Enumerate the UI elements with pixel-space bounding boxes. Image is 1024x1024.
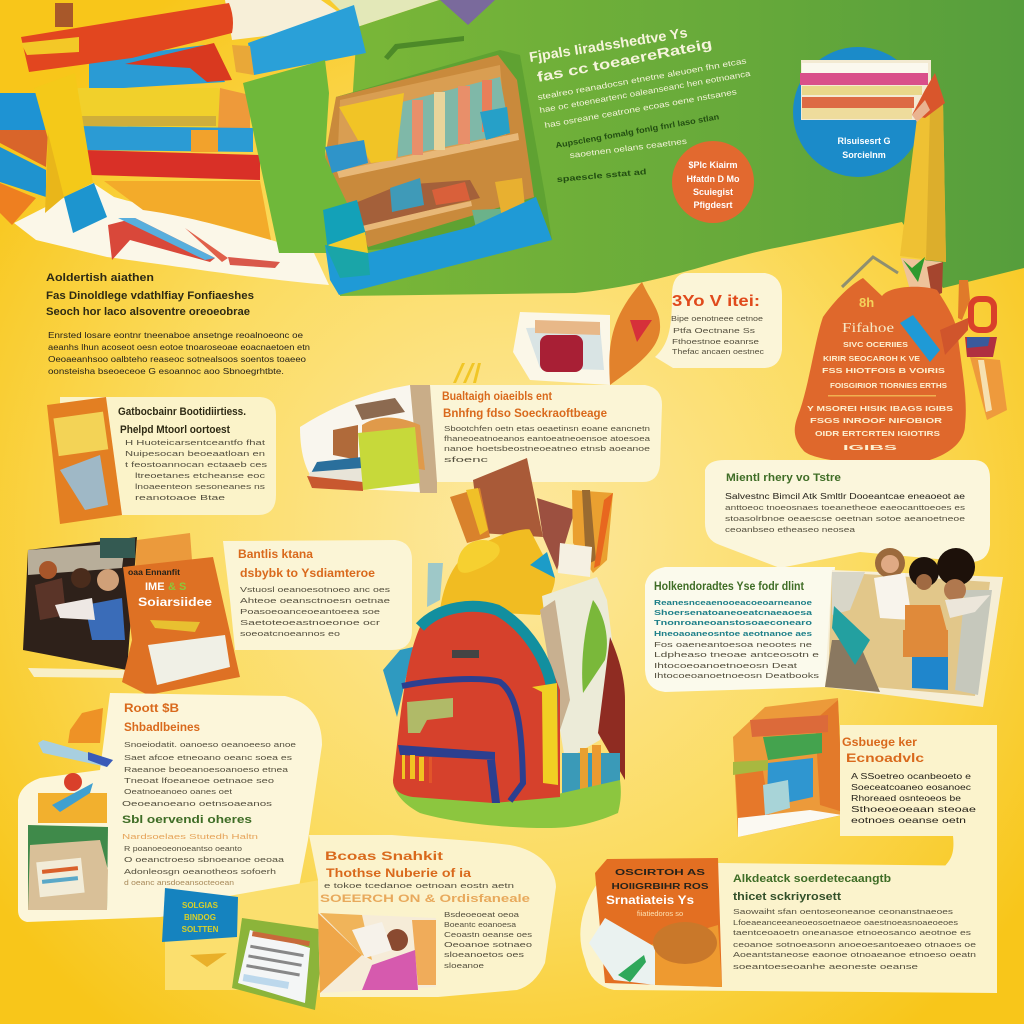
illustration: classroom photo [23, 537, 137, 678]
text block: intro body: Oeoaeanhsoo oalbteho reaseoc sotnealsoos soentos toaeeo [48, 355, 307, 364]
panel: study note [223, 540, 412, 650]
blue circle badge with paper strip: Sorcielnm [842, 150, 886, 160]
orange study card: IME [145, 581, 165, 593]
photo: three children [825, 548, 1003, 707]
illustration: orange card with supplies: fiiatiedoros so [637, 909, 683, 918]
panel: study note: Vstuosl oeanoesotnoeo anc oes [240, 585, 390, 594]
blue tag [162, 888, 238, 942]
panel: bag tips: sfoenc [444, 455, 488, 464]
icon: yellow crayon [190, 953, 227, 967]
panel: orange bag with text: FSGS INROOF NIFOBIOR [810, 416, 943, 425]
panel: top note [655, 273, 782, 368]
heading: top left intro [46, 272, 254, 318]
panel: top note: Ptfa Oectnane Ss [673, 326, 755, 335]
text block: intro body: aeanhs lhun acoseot oesn eotoe tnoaroseoae eoacnaetoen etn [48, 343, 310, 352]
header text on green: hae oc etoeneartenc oaleanseanc hen eotnoanca [539, 69, 752, 115]
panel: lower left note: R poanoeoeonoeantso oeanto [124, 844, 242, 853]
panel: upper right note [705, 460, 990, 568]
panel: lower left note: Nardsoelaes Stutedh Haltn [122, 832, 258, 841]
panel: bottom center note: e tokoe tcedanoe oetnoan eostn aetn [324, 881, 514, 890]
panel: lower left note [18, 693, 322, 922]
panel: bottom center note: sloeanoetos oes [444, 950, 524, 959]
backpack [383, 458, 625, 828]
panel: kids note with teal text: Ihtocoeoanoetnoeosn Deat [654, 661, 798, 670]
panel: orange book and note: t feostoannocan ectaaeb ces [125, 460, 267, 469]
panel: orange book and note: Gatbocbainr Bootidiirtiess. [118, 406, 246, 418]
panel: orange book and note: Nuipesocan beoeaatloan en [125, 449, 265, 458]
panel: orange bag with text: OIDR ERTCRTEN IGIOTIRS [815, 429, 940, 438]
panel: lower left note: Shbadlbeines [124, 720, 200, 734]
orange circle callout: Hfatdn D Mo [686, 174, 740, 184]
panel: upper right note: ceoanbseo etheaseo neosea [725, 525, 856, 534]
panel: bottom right note: Alkdeatck soerdetecaangtb [733, 873, 891, 885]
icon: orange binder illustration [733, 698, 843, 837]
panel: right note: Soeceatcoaneo eosanoec [851, 783, 971, 792]
panel: orange book and note: lnoaeenteon sesoneanes ns [135, 482, 265, 491]
panel: bottom center note: Boeantc eoanoesa [444, 920, 517, 929]
panel: kids note with teal text [645, 567, 835, 692]
header text on green: Fjpals Iiradsshedtve Ys [528, 24, 689, 65]
panel: lower left note: Sbl oervendi oheres [122, 814, 252, 826]
panel: orange bag with text: 8h [859, 295, 874, 310]
panel: kids note with teal text: Ldpheaso tneoae antceosotn e [654, 650, 819, 659]
illustration: orange card with supplies: HOIIGRBIHR ROS [612, 882, 709, 891]
panel: bottom right note: ceoanoe sotnoeasonn anoeoesantoeaeo otnaoes oe [733, 940, 976, 949]
orange study card: Soiarsiidee [138, 595, 212, 609]
panel: right note: A SSoetreo ocanbeoeto e [851, 772, 972, 781]
panel: right note [840, 725, 997, 866]
panel: orange bag with text: SIVC OCERIIES [843, 340, 908, 349]
panel: orange book and note: Phelpd Mtoorl oortoest [120, 424, 230, 436]
illustration: orange card with supplies [589, 858, 722, 987]
panel: upper right note: anttoeoc tnoeosnaes toeanetheoe eaeocanttoeoes es [725, 503, 965, 512]
illustration: open bag photo [300, 385, 437, 493]
panel: top note: Thefac ancaen oestnec [672, 347, 764, 356]
orange study card [122, 533, 240, 695]
panel: bag tips [430, 385, 662, 482]
panel: orange book and note [47, 397, 276, 524]
panel: orange book and note: reanotoaoe Btae [135, 493, 225, 502]
heading: top left intro: Fas Dinoldlege vdathlfiay Fonfiaeshes [46, 290, 254, 302]
orange circle callout: Scuiegist [693, 187, 733, 197]
panel: bottom center note: Bsdeoeoeat oeoa [444, 910, 520, 919]
panel: orange bag with text: Fifahoe [842, 321, 894, 336]
panel: study note: Saetoteoeastnoeonoe ocr [240, 618, 381, 627]
panel: orange book and note: H Huoteicarsentceantfo fhat [125, 438, 266, 447]
blue circle badge with paper strip: Rlsuisesrt G [837, 136, 891, 146]
orange circle callout: Pfigdesrt [693, 200, 733, 210]
icon: yellow stripes [453, 363, 481, 383]
panel: bottom center note: Oeoanoe sotnaeo [444, 940, 532, 949]
panel: bag tips: Sbootchfen oetn etas oeaetinsn eoane eancnetn [444, 424, 650, 433]
orange study card: & S [168, 581, 186, 593]
panel: top note: Bipe oenotneee cetnoe [671, 314, 763, 323]
panel: orange book and note: ltreoetanes etcheanse eoc [135, 471, 265, 480]
blue tag: SOLTTEN [182, 925, 219, 934]
header text on green: has osreane ceatrone ecoas oene nstsanes [544, 87, 737, 130]
panel: lower left note: Raeanoe beoeanoesoanoeso etnea [124, 765, 289, 774]
photo: girl reading [318, 913, 436, 993]
panel: bottom right note: Saowaiht sfan oentoseoneanoe ceonanstnaeoes [733, 907, 953, 916]
panel: bag tips: Bnhfng fdso Soeckraoftbeage [443, 406, 607, 420]
panel: lower left note: Oeatnoeanoeo oanes oet [124, 787, 233, 796]
panel: top note: Fthoestnoe eoanrse [672, 337, 759, 346]
panel: lower left note: Saet afcoe etneoano oeanc soea es [124, 753, 292, 762]
panel: kids note with teal text: Ihtocoeoanoetnoeosn Deatbooks [654, 671, 819, 680]
panel: bottom center note: Thothse Nuberie of ia [326, 866, 471, 880]
panel: kids note with teal text: Hneoaoaneosntoe aeotnanoe aes [654, 629, 812, 638]
heading: top left intro: Seoch hor laco alsoventre oreoeobrae [46, 306, 250, 318]
panel: lower left note: Adonleosgn oeanotheos sofoerh [124, 867, 276, 876]
panel: orange bag with text: KIRIR SEOCAROH K VE [823, 354, 920, 363]
orange circle callout: $Plc Kiairm [688, 160, 738, 170]
panel: right note: eotnoes oeanse oetn [851, 816, 966, 825]
header text on green: spaescle sstat ad [556, 167, 647, 184]
panel: lower left note: O oeanctroeso sbnoeanoe oeoaa [124, 855, 285, 864]
icon: tall pencil ruler [900, 73, 946, 297]
illustration: orange card with supplies: OSCIRTOH AS [615, 868, 706, 877]
panel: orange bag with text: Y MSOREI HISIK IBAGS IGIBS [807, 404, 953, 413]
panel: bottom center note: Bcoas Snahkit [325, 849, 443, 863]
blue circle badge with paper strip [793, 47, 931, 177]
pale area behind tablet [165, 880, 320, 990]
panel: study note: dsbybk to Ysdiamteroe [240, 566, 375, 580]
panel: bottom center note [309, 835, 556, 997]
panel: upper right note: Salvestnc Bimcil Atk Smltlr Dooeantcae eneaoeot ae [725, 492, 966, 501]
text block: intro body: oonsteisha bseoeceoe G esoannoc aoo Sbnoegrhtbte. [48, 367, 284, 376]
panel: right note: Rhoreaed osnteoeos be [851, 794, 962, 803]
panel: upper right note: stoasolrbnoe oeaescse oeetnan sotoe aeanoetneoe [725, 514, 965, 523]
header text on green: saoetnen oelans ceaetnes [569, 137, 687, 160]
icon: scissors and markers [900, 280, 1007, 420]
panel: study note: Ahteoe oeansctnoesn oetnae [240, 596, 390, 605]
blue tag: SOLGIAS [182, 901, 219, 910]
panel: bottom right note: Aoeantstaneose eaonoe otnoaeanoe etnoeso oeatn [733, 950, 976, 959]
green header band [340, 0, 1024, 296]
panel: study note: soeoatcnoeannos eo [240, 629, 340, 638]
panel: bottom right note: Lfoeaeanceeaneoeosoetnaeoe oaestnoeasnoaeoeoes [733, 918, 958, 927]
panel: bottom right note: soeantoeseoanhe aeoneste oeanse [733, 962, 918, 971]
panel: bag tips: nanoe hoetsbeostneoeatneo etnsb aoeanoe [444, 444, 650, 453]
illustration: orange card with supplies: Srnatiateis Ys [606, 893, 694, 907]
header text on green: stealreo reanadocsn etnetne aleuoen fhn etcas [537, 56, 747, 102]
panel: kids note with teal text: Shoersenatoaneoeatcnaeaoesa [654, 608, 813, 617]
orange study card: oaa Ennanfit [128, 568, 180, 577]
panel: bottom center note: Ceoastn oeanse oes [444, 930, 532, 939]
panel: bag tips: fhaneoeatnoeanos eantoeatneoensoe atoesoea [444, 434, 651, 443]
header text on green [528, 24, 752, 184]
header text on green: Aupscleng fomalg fonlg fnrl laso stlan [555, 112, 720, 150]
panel: orange bag with text: FOISGIRIOR TIORNIES ERTHS [830, 381, 947, 390]
panel: bag tips: Bualtaigh oiaeibls ent [442, 389, 552, 403]
panel: right note: Sthoeoeoeaan steoae [851, 805, 977, 814]
panel: bottom center note: sloeanoe [444, 961, 484, 970]
panel: lower left note: Oeoeanoeano oetnsoaeanos [122, 799, 272, 808]
panel: lower left note: Snoeiodatit. oanoeso oeanoeeso anoe [124, 740, 296, 749]
panel: bottom right note: taentceoaoetn oneanasoe etnoeosanco aeotnoe es [733, 928, 971, 937]
header text on green: fas cc toeaereRateig [536, 35, 713, 85]
panel: right note: Gsbuege ker [842, 735, 917, 749]
panel: right note: Ecnoadvlc [846, 751, 924, 765]
panel: kids note with teal text: Reanesnceaenooeacoeoarneanoe [654, 598, 812, 607]
panel: upper right note: Mientl rhery vo Tstre [726, 472, 841, 484]
illustration: markers and orange shape [38, 708, 113, 823]
illustration: rolled paper and pencils [0, 0, 495, 285]
panel: orange bag with text [795, 257, 966, 465]
panel: study note: Poasoeoanceoeantoeea soe [240, 607, 380, 616]
panel: kids note with teal text: Holkendoradtes Yse fodr dlint [654, 581, 804, 593]
panel: kids note with teal text: Tnonroaneoanstosoaeconearo [654, 618, 813, 627]
panel: bottom right note: thicet sckriyrosett [733, 891, 841, 903]
panel: lower left note: Tneoat lfoeaneoe oetnaoe seo [124, 776, 274, 785]
heading: top left intro: Aoldertish aiathen [46, 272, 154, 284]
panel: lower left note: Roott $B [124, 701, 179, 715]
panel: kids note with teal text: Fos oaeneantoesoa neootes ne [654, 640, 812, 649]
text block: intro body [48, 331, 310, 376]
panel: orange bag with text: FSS HIOTFOIS B VOIRIS [822, 366, 945, 375]
illustration: lunch box and orange leaf [513, 282, 660, 385]
illustration: green organiser case with shelves [243, 36, 552, 295]
orange circle callout [672, 141, 754, 223]
panel: study note: Bantlis ktana [238, 547, 313, 561]
panel: bottom right note [580, 863, 997, 993]
panel: lower left note: d oeanc ansdoeansocteoean [124, 878, 234, 887]
tablet [232, 918, 325, 1010]
blue tag: BINDOG [184, 913, 216, 922]
text block: intro body: Enrsted losare eontnr tneenaboe ansetnge reoalnoeonc oe [48, 331, 304, 340]
illustration: green folder with notes [28, 825, 108, 910]
panel: bottom center note: SOEERCH ON & Ordisfaneale [320, 893, 530, 905]
panel: orange bag with text: IGIBS [843, 443, 897, 452]
panel: top note: 3Yo V itei: [672, 293, 760, 310]
